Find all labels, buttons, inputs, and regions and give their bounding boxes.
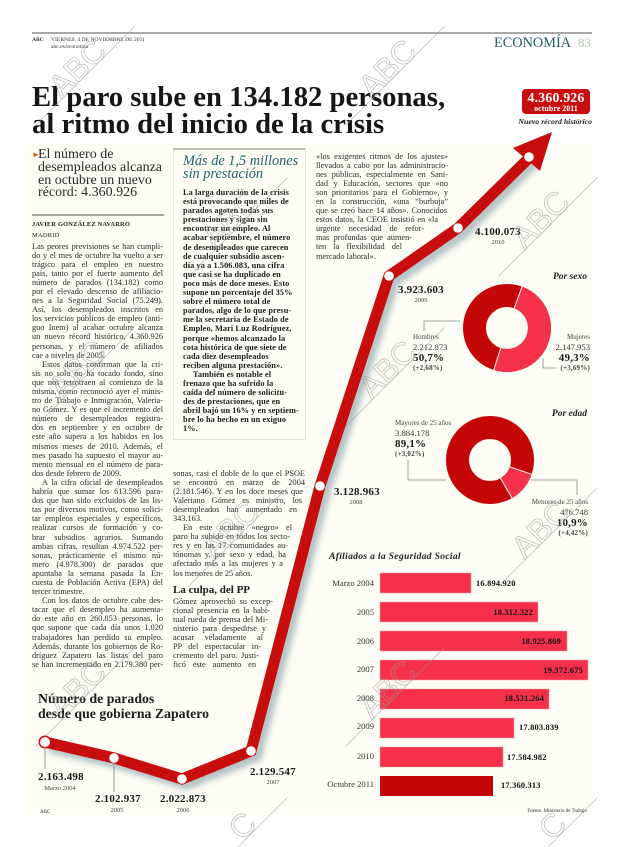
data labels: 2.163.498 [38, 771, 84, 783]
article text: column 1: personas, y el número de afiliados [32, 342, 163, 351]
bar chart heading: Afiliados a la Seguridad Social [328, 551, 461, 562]
article text: column 1: Las peores previsiones se han cumpli- [32, 242, 163, 250]
sidebar text: frenazo que ha sufrido la [183, 379, 273, 388]
watermarks: C [221, 805, 263, 847]
donut labels: 89,1% [395, 438, 426, 450]
byline: MADRID [32, 232, 60, 239]
article text: column 2: Valeriano Gómez es ministro, los [173, 496, 302, 505]
data labels: Marzo 2004 [44, 785, 77, 792]
section heading: ECONOMÍA [494, 35, 571, 51]
article text: column 1: que supone que cada día unos 1.020 [32, 623, 163, 632]
chart title [38, 691, 209, 721]
article text: column 1: país, tanto por el fuerte aumento del [32, 269, 163, 278]
article text: column 3: mercado laboral». [316, 252, 376, 261]
arrow head [513, 132, 552, 171]
subheading: La culpa, del PP: La culpa, del PP [173, 584, 250, 596]
line shadow [49, 162, 534, 784]
article text: column 1: un nuevo récord histórico, 4.360.926 [32, 332, 163, 341]
leader lines [45, 747, 114, 792]
watermarks: ABC [504, 493, 576, 565]
record badge [522, 89, 590, 114]
bar values: 18.925.869 [521, 637, 561, 646]
sidebar text [183, 188, 299, 433]
deck: standfirst: en octubre un nuevo [38, 173, 152, 188]
sidebar text: de cualquier subsidio ascen- [183, 252, 284, 261]
article text: column 3: llevados a cabo por las administracio- [316, 161, 448, 170]
article text: column 1: Así, los desempleados inscritos en [32, 305, 163, 314]
data labels: 4.100.073 [475, 226, 521, 238]
article text: column 1: los servicios públicos de empleo (anti- [32, 314, 163, 323]
donut labels: (+3,69%) [560, 364, 590, 372]
article text: column 2 [173, 468, 305, 578]
sidebar heading: Más de 1,5 millones [183, 153, 298, 169]
article text: column 1: sis no solo no ha tocado fondo, sino [32, 369, 163, 378]
sidebar text: que casi se ha duplicado en [183, 270, 281, 279]
data labels: 3.128.963 [334, 486, 380, 498]
sidebar text: poco más de doce meses. Esto [183, 279, 289, 288]
article text: column 1: Con los datos de octubre cabe des- [42, 596, 163, 605]
sidebar text: abril bajó un 16% y en septiem- [183, 406, 299, 415]
donut labels: 49,3% [559, 352, 590, 364]
badge caption: Nuevo récord histórico [518, 117, 592, 126]
sidebar text: cada diez desempleados [183, 352, 269, 361]
donut labels: (+3,02%) [395, 450, 425, 458]
article text: column 2: tónomas y, por sexo y edad, ha [173, 550, 286, 559]
sidebar text: reciben alguna prestación». [183, 361, 282, 370]
sidebar text: de desempleados que carecen [183, 243, 288, 252]
header: date and web: ABC [32, 37, 44, 43]
article text: column 2: paro ha subido en todos los secto- [173, 532, 290, 541]
article text: column 1 [32, 242, 163, 669]
article text: column 1: trágico para el empleo en nuestro [32, 260, 163, 269]
sidebar text: día ya a 1.506.083, una cifra [183, 261, 284, 270]
bar values: 17.803.839 [519, 723, 559, 732]
article text: column 1: ambas cifras, resultan 4.974.522 per- [32, 542, 163, 551]
article text: column 2 continuation: Gómez aprovechó su excep- [173, 596, 273, 606]
byline [32, 220, 130, 239]
article text: column 1: tas por diversos motivos, como solici- [32, 505, 163, 514]
donut labels: (+4,42%) [558, 529, 588, 537]
panel: sidebar sin prestación [173, 148, 306, 440]
watermarks: ABC [41, 32, 113, 104]
bar year labels: 2008 [357, 693, 374, 703]
article text: column 2: 343.163. [173, 514, 202, 523]
bar year labels: 2009 [357, 721, 374, 731]
bar year labels: 2007 [357, 664, 375, 674]
donut labels: 10,9% [557, 517, 588, 529]
article text: column 1: tar empleos especiales y específicos, [32, 514, 163, 523]
red rising line [45, 155, 532, 779]
watermarks: ABC [194, 183, 266, 255]
sidebar heading: sin prestación [183, 166, 263, 182]
watermarks: ABC [351, 32, 423, 104]
article text: column 2 continuation [173, 596, 273, 669]
article text: column 1: dos que han sido excluidos de las lis- [32, 496, 163, 505]
donut labels: (+2,68%) [413, 364, 443, 372]
article text: column 1: apuntaba la semana pasada la En- [32, 569, 163, 578]
article text: column 2: sonas, casi el doble de lo que el PSOE [173, 468, 305, 478]
article text: column 1: número de desempleados registra- [32, 414, 163, 423]
article text: column 1: A la cifra oficial de desempleados [42, 478, 163, 487]
bar year labels [327, 578, 375, 789]
donut labels: Por sexo [553, 272, 587, 282]
section heading: 83 [578, 35, 591, 50]
article text: column 1: guo Inem) al acabar octubre alcanza [32, 323, 163, 332]
article text: column 1: nes a la Seguridad Social (75.249). [32, 296, 163, 305]
sidebar text: sobre el número total de [183, 297, 270, 306]
article text: column 2 continuation: ficó este aumento en [173, 660, 256, 669]
article text: column 2 continuation: PP del espectacular in- [173, 642, 261, 651]
watermarks: ABC [194, 493, 266, 565]
article text: column 2 continuation: cremento del paro. Justi- [173, 651, 259, 660]
bar values: 18.531.264 [504, 694, 545, 703]
data labels: 2005 [110, 807, 124, 814]
article text: column 1: Estos datos confirman que la cri- [42, 360, 163, 369]
sidebar text: des de prestaciones, que en [183, 397, 280, 406]
article text: column 1: mento mensual en el número de para- [32, 460, 163, 469]
bar year labels: 2006 [357, 636, 375, 646]
article text: column 1: trabajadores han perdido su empleo. [32, 633, 163, 642]
donut labels: 3.884.178 [395, 428, 429, 438]
article text: column 2 continuation: acusar veladamente al [173, 633, 263, 642]
article text: column 3: urgente necesidad de refor- [316, 224, 424, 233]
donut labels: Por edad [552, 409, 587, 419]
donut labels: 2.212.873 [413, 342, 447, 352]
byline rule [32, 214, 164, 216]
bar year labels: 2005 [357, 607, 374, 617]
sidebar text: También es notable el [193, 370, 271, 379]
bars [380, 573, 588, 796]
deck: standfirst: ► [32, 150, 40, 159]
data labels: 2.129.547 [250, 766, 296, 778]
article text: column 2: desempleados han aumentado en [173, 505, 297, 514]
bar values: 19.372.675 [543, 666, 583, 675]
article text: column 3 [316, 152, 448, 261]
bar values: 16.894.920 [476, 579, 516, 588]
source: Fuente: Ministerio de Trabajo [527, 809, 587, 814]
article text: column 1: tacar que el desempleo ha aumenta- [32, 605, 163, 614]
article text: column 3: son prioritarios para el Gobierno», y [316, 188, 448, 197]
article text: column 2: res y en las 17 comunidades au- [173, 541, 288, 550]
header: date and web: VIERNES, 4 DE NOVIEMBRE DE 2011 [51, 37, 145, 43]
article text: column 1: realizar cursos de formación y co- [32, 523, 163, 532]
header: date and web: abc.es/economia [51, 44, 88, 50]
bar values: 17.584.982 [507, 753, 547, 762]
article text: column 1: mes pasado ha supuesto el mayor au- [32, 451, 163, 460]
donut labels: 50,7% [413, 352, 444, 364]
data labels: 2.102.937 [95, 793, 141, 805]
article text: column 1: misma, como reconoció ayer el minis- [32, 387, 163, 396]
article text: column 3: «los exigentes ritmos de los ajustes» [316, 152, 448, 160]
article text: column 2: En este octubre «negro» el [183, 523, 292, 532]
data points [40, 152, 534, 784]
sidebar text: La larga duración de la crisis [183, 188, 289, 197]
article text: column 2 continuation: tual rueda de prensa del Mi- [173, 615, 268, 624]
donut labels: Menores de 25 años [532, 498, 588, 506]
article text: column 1: cuesta de Población Activa (EPA) del [32, 578, 163, 587]
byline: JAVIER GONZÁLEZ NAVARRO [32, 221, 130, 228]
title: al ritmo del inicio de la crisis [32, 108, 384, 140]
article text: column 1: habría que sumar los 613.596 para- [32, 487, 163, 496]
watermarks: C [531, 805, 573, 847]
article text: column 2: (2.181.546). Y en los doce meses que [173, 487, 303, 496]
watermarks: ABC [41, 333, 113, 405]
header: date and web [32, 37, 145, 50]
article text: column 2: los menores de 25 años. [173, 569, 252, 578]
data labels: 2010 [492, 239, 504, 246]
article text: column 2: afectado más a las mujeres y a [173, 559, 283, 568]
sidebar text: me la secretaria de Estado de [183, 315, 289, 324]
data labels: 2006 [176, 807, 190, 814]
article text: column 1: dos desde febrero de 2009. [32, 469, 121, 478]
article text: column 1: que nos retrotraen al comienzo de la [32, 378, 163, 387]
article text: column 1: cae a niveles de 2005. [32, 351, 105, 360]
data labels: 2.022.873 [160, 793, 206, 805]
watermarks: ABC [351, 333, 423, 405]
record badge: octubre 2011 [534, 104, 578, 113]
chart title: desde que gobierna Zapatero [38, 706, 209, 721]
article text: column 1: no Gómez. Y es que el incremento del [32, 405, 163, 414]
data labels [38, 226, 521, 815]
article text: column 1: mismos meses de 2010. Además, el [32, 442, 163, 451]
sidebar text: porque «hemos alcanzado la [183, 334, 285, 342]
sidebar text: parados, algo de lo que presu- [183, 306, 291, 315]
watermarks: ABC [504, 183, 576, 255]
article text: column 1: este año supera a los habidos en los [32, 432, 163, 441]
bar year labels: Octubre 2011 [327, 779, 374, 789]
article text: column 1: por el elevado descenso de afiliacio- [32, 287, 163, 296]
chart title: Número de parados [38, 691, 154, 706]
donut labels: Mayores de 25 años [395, 419, 451, 427]
sidebar text: está provocando que miles de [183, 197, 289, 206]
article text: column 3: mas profundas que aumen- [316, 233, 412, 242]
article text: column 2 continuation: cional presencia en la habi- [173, 606, 270, 615]
sidebar text: Empleo, Mari Luz Rodríguez, [183, 324, 291, 333]
article text: column 1: do y el mes de octubre ha vuelto a ser [32, 251, 163, 260]
sidebar text: parados agoten todas sus [183, 206, 273, 215]
article text: column 1: Además, durante los gobiernos de Ro- [32, 642, 163, 651]
article text: column 3: nes públicas, especialmente en Sani- [316, 170, 448, 179]
sidebar text: prestaciones y sigan sin [183, 215, 268, 224]
article text: column 1: do este año en 260.853 personas, lo [32, 614, 163, 623]
header rule [32, 32, 592, 34]
article text: column 1: dos en septiembre y en octubre de [32, 423, 163, 432]
article text: column 1: tercer trimestre. [32, 587, 85, 596]
donut: por edad [449, 419, 532, 501]
article text: column 1: dríguez Zapatero las listas del paro [32, 651, 163, 660]
record badge: 4.360.926 [528, 90, 584, 105]
donut labels: Mujeres [567, 333, 590, 341]
sidebar text: caída del número de solicitu- [183, 388, 287, 397]
deck: standfirst: récord: 4.360.926 [38, 185, 137, 200]
sidebar text: cota histórica de que siete de [183, 343, 287, 352]
article text: column 3: en la construcción, «una “burbuja” [316, 197, 448, 206]
article text: column 1: brar subsidios agrarios. Sumando [32, 532, 163, 542]
article text: column 2: se encontró en marzo de 2004 [173, 478, 305, 487]
article text: column 3: estos datos, la CEOE insistió en «la [316, 215, 438, 224]
data labels: 2007 [266, 779, 280, 786]
sidebar text: bre lo ha hecho en un exiguo [183, 415, 286, 424]
bar year labels: 2010 [357, 751, 374, 761]
article text: column 1: se han incrementado en 2.179.380 per- [32, 660, 163, 669]
title: El paro sube en 134.182 personas, [32, 81, 445, 113]
bar values: 18.312.322 [493, 608, 533, 617]
data labels: 2008 [350, 499, 362, 506]
bar year labels: Marzo 2004 [332, 578, 375, 588]
data labels: ABC [40, 810, 51, 815]
sidebar heading [182, 153, 298, 182]
article text: column 1: mero (4.978.300) de parados que [32, 560, 163, 569]
watermarks: ABC [351, 653, 423, 725]
article text: column 3: dad y Educación, sectores que «no [316, 179, 448, 188]
article text: column 1: número de parados (134.182) como [32, 278, 163, 287]
cream page background [25, 143, 592, 815]
sidebar text: 1%. [183, 424, 198, 433]
sidebar text: supone un porcentaje del 35% [183, 288, 292, 297]
data labels: 2009 [414, 297, 428, 304]
article text: column 2 continuation: nisterio para despedirse y [173, 624, 266, 633]
donut leader lines [408, 321, 577, 495]
article text: column 1: tro de Trabajo e Inmigración, Valeria- [32, 396, 163, 405]
bar values: 17.360.313 [501, 781, 541, 790]
donut labels [395, 272, 590, 537]
deck: standfirst: desempleados alcanza [38, 160, 162, 175]
donut labels: Hombres [413, 333, 439, 341]
article text: column 3: que se creó hace 14 años». Conocidos [316, 206, 447, 215]
bar values [476, 579, 583, 790]
watermarks: ABC [41, 653, 113, 725]
title [32, 81, 445, 140]
line start cap [38, 736, 52, 748]
deck: standfirst: El número de [38, 147, 113, 162]
donut labels: 2.147.953 [556, 342, 590, 352]
deck: standfirst [32, 147, 162, 200]
donut labels: 476.748 [560, 507, 588, 517]
sidebar text: encontrar un empleo. Al [183, 224, 270, 233]
data labels: 3.923.603 [398, 284, 444, 296]
donut: por sexo [465, 286, 549, 370]
article text: column 3: ten la flexibilidad del [316, 242, 402, 251]
sidebar text: acabar septiembre, el número [183, 233, 290, 242]
article text: column 1: sonas, prácticamente el mismo nú- [32, 551, 163, 560]
